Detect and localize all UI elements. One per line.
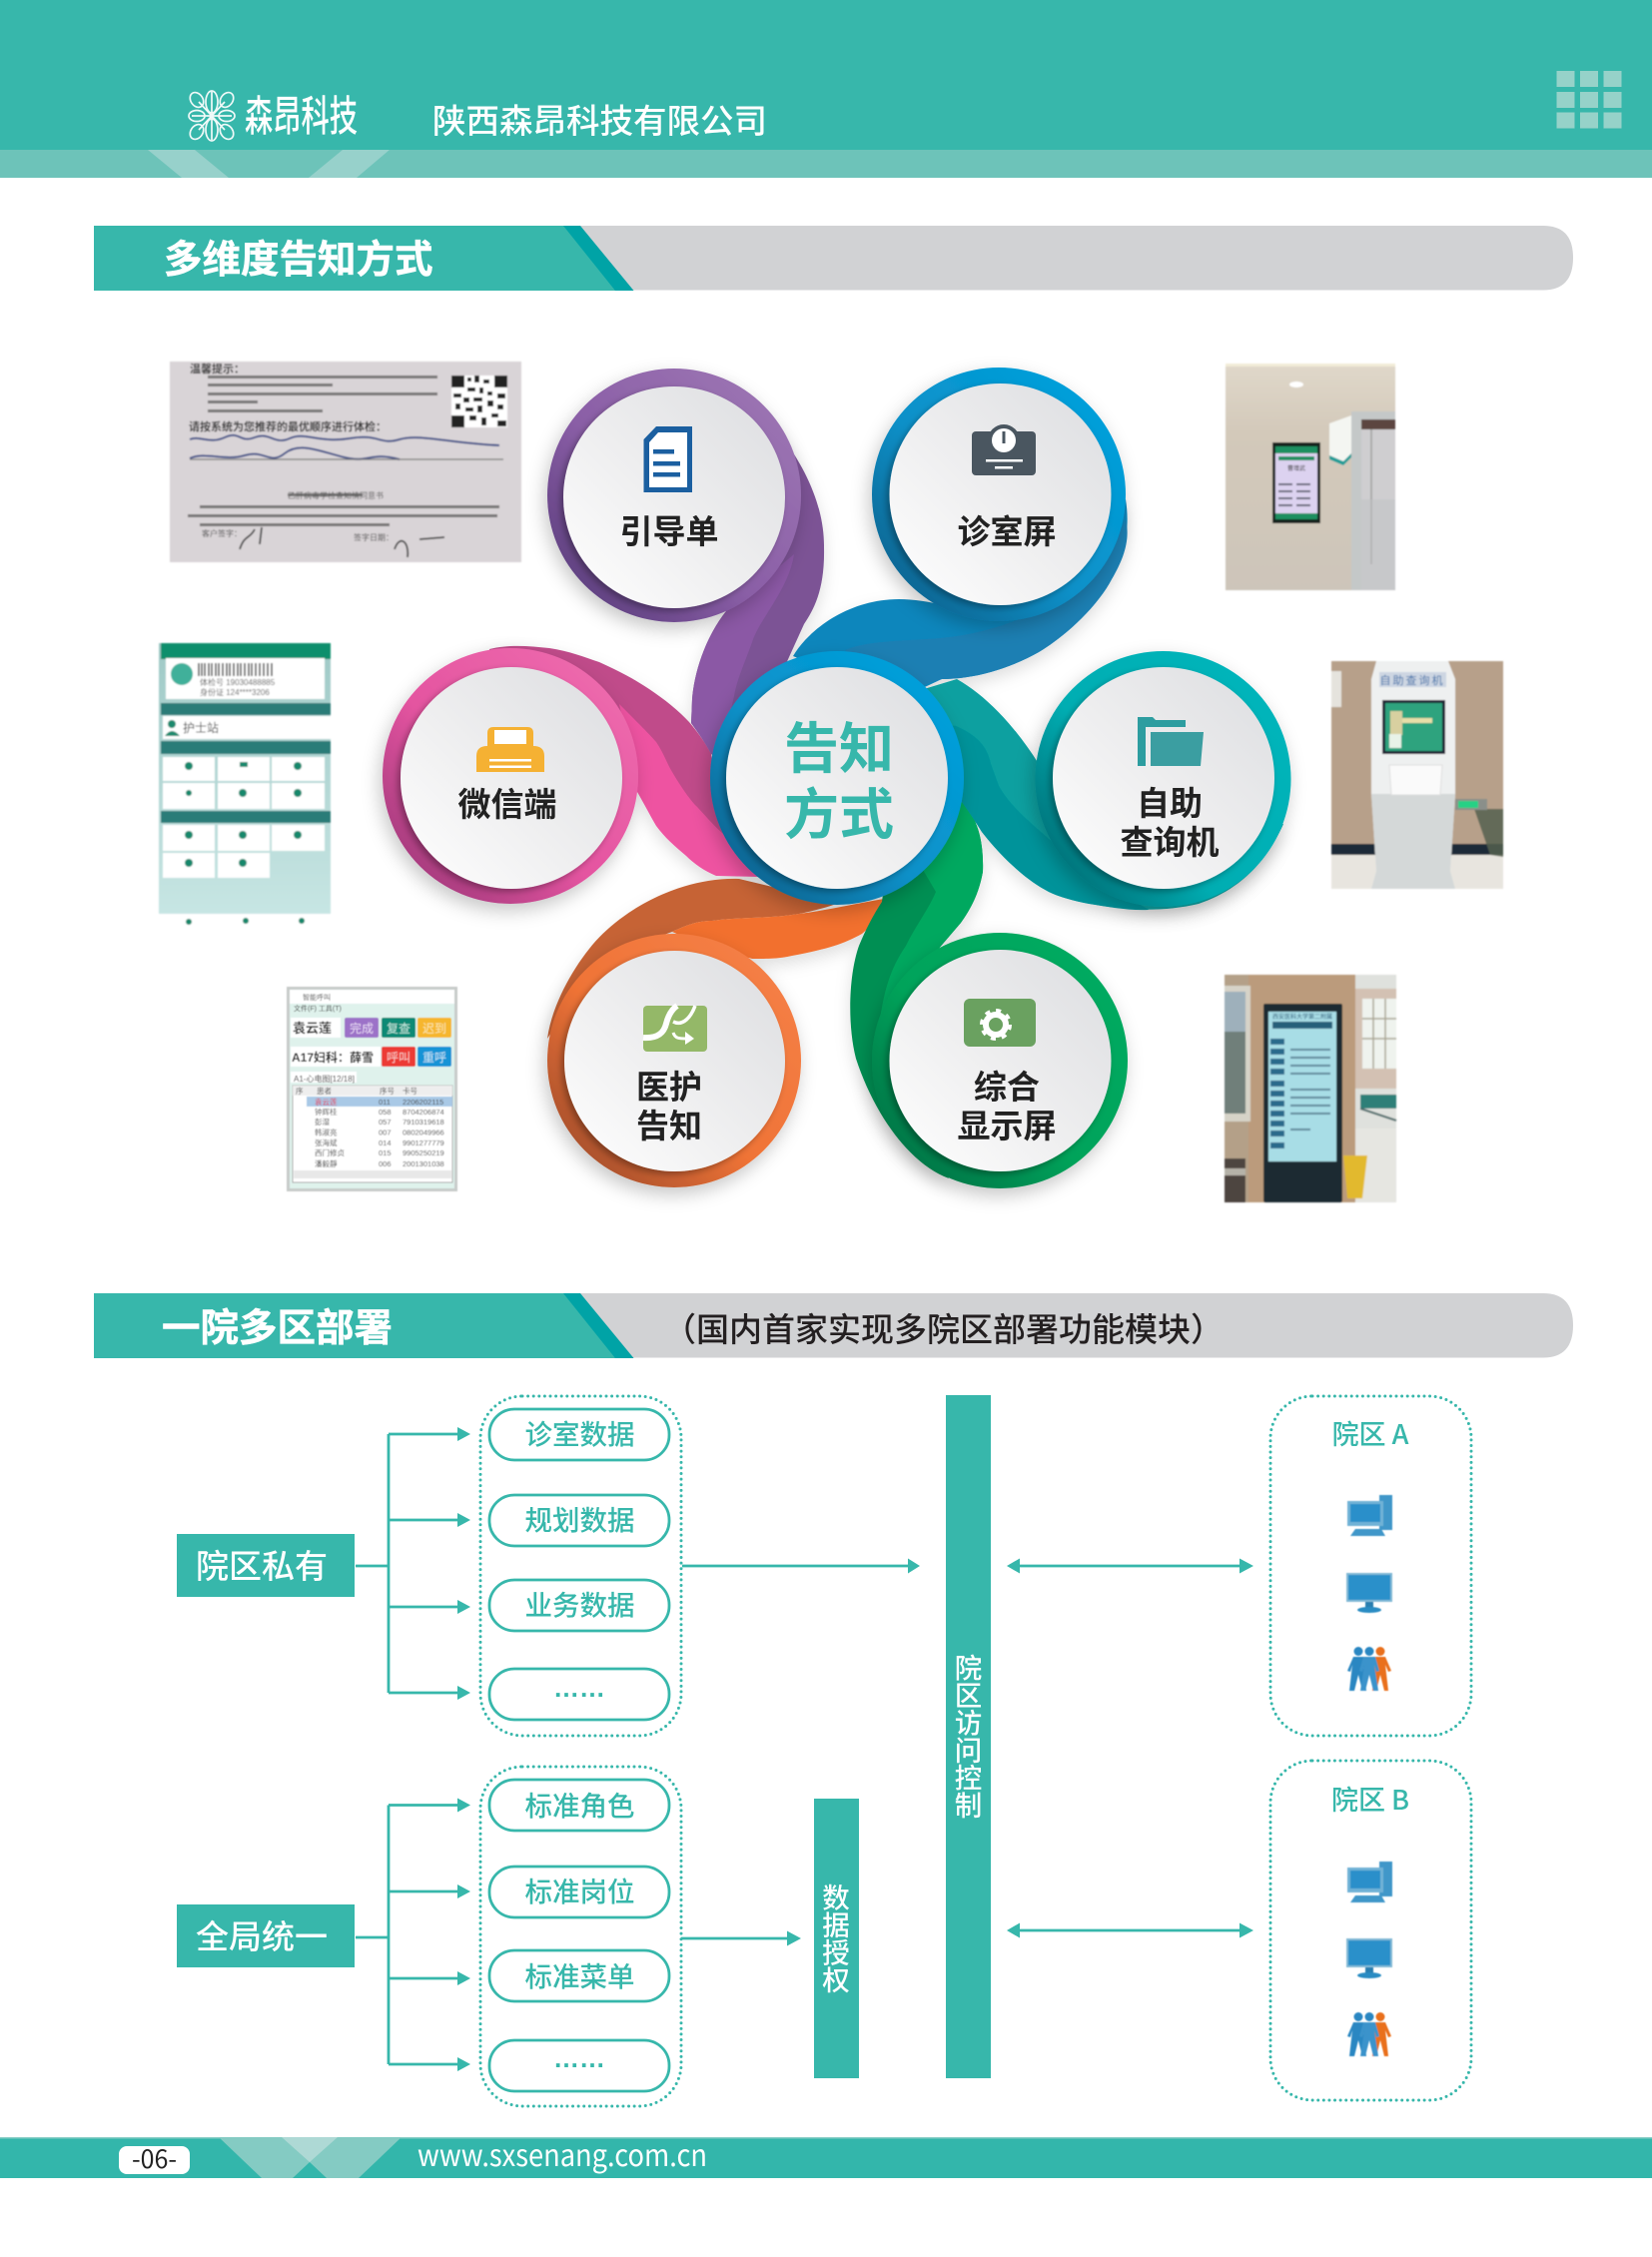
photo: 医护告知 software window: 9905250219 [403, 1148, 444, 1157]
group: global standard pills [480, 1767, 681, 2106]
bar: 院区访问控制: 访 [955, 1708, 982, 1739]
bar: 院区访问控制: 院 [955, 1653, 982, 1684]
section heading: 一院多区部署: 一院多区部署 [162, 1307, 393, 1350]
icon: printer [476, 727, 544, 772]
node: 微信端 [383, 648, 638, 904]
website url: www.sxsenang.com.cn [417, 2131, 707, 2175]
photo: 综合显示屏 kiosk: 西安医科大学第二附属 [1272, 1013, 1332, 1021]
arrow: global data to data authorization [681, 1931, 801, 1945]
photo: 医护告知 software window: 潘毅靜 [315, 1158, 338, 1168]
node: 引导单: 引导单 [619, 513, 719, 550]
photo: 诊室屏 on wall [1226, 364, 1395, 590]
bar: 数据授权: 据 [822, 1909, 850, 1941]
logo: 森昂科技: 森昂科技 [245, 93, 358, 140]
box: 院区私有: 院区私有 [196, 1548, 328, 1585]
node: 诊室屏: 诊室屏 [957, 513, 1057, 550]
group: private data pills: 业务数据 [525, 1590, 635, 1621]
header band [0, 0, 1652, 178]
bar: 数据授权: 授 [822, 1937, 850, 1968]
photo: 医护告知 software window: 文件(F) 工具(T) [294, 1004, 342, 1013]
box: 全局统一 [177, 1904, 355, 1967]
node: 综合显示屏 [872, 933, 1128, 1188]
node: 医护告知: 医护 [636, 1069, 702, 1106]
bar: 数据授权 [814, 1799, 859, 2078]
photo: 医护告知 software window: 智能呼叫 [303, 993, 331, 1002]
panel: 院区 B: 院区 B [1331, 1779, 1409, 1818]
photo: 医护告知 software window: 卡号 [403, 1086, 417, 1096]
group: private data pills: 规划数据 [525, 1505, 635, 1536]
photo: 自助查询机 kiosk [1331, 661, 1503, 889]
node: center 告知方式 [710, 651, 964, 905]
photo: 医护告知 software window: 重呼 [422, 1051, 446, 1065]
group: private data pills [480, 1396, 681, 1736]
photo: 医护告知 software window: 序号 [380, 1086, 395, 1096]
photo: 微信端 phone screen: 体检号 19030488885 [200, 677, 276, 687]
photo: 医护告知 software window: 057 [379, 1118, 392, 1127]
page number [119, 2140, 190, 2176]
arrow: access control to 院区 B [1007, 1923, 1253, 1937]
photo: 引导单 paper: 签字日期： [354, 532, 394, 542]
panel: 院区 A [1270, 1396, 1471, 1736]
icon: grid [1556, 71, 1622, 128]
photo: 医护告知 software window: A1-心电图[12/18] [294, 1074, 355, 1084]
node: center 告知方式: 方式 [784, 784, 894, 846]
photo: 医护告知 software window: 058 [379, 1108, 392, 1117]
box: 全局统一: 全局统一 [196, 1918, 328, 1955]
photo: 医护告知 software window: 0802049966 [403, 1128, 444, 1136]
bar: 数据授权: 数 [822, 1882, 850, 1913]
photo: 微信端 phone screen [159, 643, 331, 931]
photo: 医护告知 software window: 钟辉桂 [315, 1107, 338, 1117]
node: 医护告知 [547, 934, 801, 1187]
photo: 医护告知 software window: 完成 [350, 1021, 374, 1036]
icon: folder [1138, 717, 1204, 766]
panel: 院区 B [1270, 1761, 1471, 2100]
photo: 医护告知 software window: 彭湿 [315, 1117, 330, 1127]
section heading: 一院多区部署 [94, 1293, 1573, 1358]
section heading: 多维度告知方式: 多维度告知方式 [164, 239, 433, 282]
photo: 医护告知 software window: 序 [296, 1086, 304, 1096]
photo: 医护告知 software window: 袁云莲 [315, 1097, 338, 1107]
node: 综合显示屏: 显示屏 [957, 1108, 1057, 1144]
photo: 医护告知 software window: 015 [379, 1148, 392, 1157]
group: private data pills: …… [553, 1673, 605, 1703]
group: private data pills: 诊室数据 [525, 1419, 635, 1450]
footer band [0, 2137, 1652, 2178]
icon: people [1347, 1647, 1391, 1691]
logo: 森昂科技 [187, 90, 358, 142]
node: 自助查询机: 自助 [1137, 785, 1203, 822]
ribbons of the swirl diagram [489, 377, 1283, 1178]
photo: 医护告知 software window: A17妇科：薛雪 [292, 1050, 374, 1065]
photo: 医护告知 software window: 9901277779 [403, 1138, 444, 1147]
icon: people [1347, 2012, 1391, 2056]
photo: 医护告知 software window [287, 987, 457, 1191]
bar: 数据授权: 权 [822, 1965, 850, 1995]
photo: 医护告知 software window: 2206202115 [403, 1098, 443, 1107]
photo: 引导单 paper: 乙肝病毒学检查知情同意书 [288, 490, 384, 500]
node: center 告知方式: 告知 [784, 718, 894, 780]
photo: 引导单 paper: 温馨提示： [190, 362, 245, 376]
connector: 全局统一 branches [356, 1798, 470, 2071]
photo: 引导单 paper: 请按系统为您推荐的最优顺序进行体检： [189, 419, 387, 433]
photo: 医护告知 software window: 张海斌 [315, 1137, 338, 1147]
bar: 院区访问控制 [946, 1395, 991, 2078]
bar: 院区访问控制: 问 [955, 1736, 982, 1766]
group: global standard pills: 标准菜单 [525, 1961, 635, 1992]
photo: 微信端 phone screen: 身份证 124****3206 [200, 687, 270, 697]
section heading: 一院多区部署: （国内首家实现多院区部署功能模块） [663, 1311, 1224, 1348]
node: 综合显示屏: 综合 [974, 1069, 1040, 1106]
photo: 医护告知 software window: 迟到 [422, 1022, 446, 1036]
icon: screen with gauge [972, 424, 1036, 475]
arrow: access control to 院区 A [1007, 1558, 1253, 1574]
photo: 医护告知 software window: 8704206874 [403, 1108, 444, 1117]
photo: 医护告知 software window: 006 [379, 1159, 392, 1168]
group: global standard pills: 标准岗位 [525, 1877, 635, 1907]
node: 自助查询机: 查询机 [1121, 824, 1219, 861]
box: 院区私有 [177, 1534, 355, 1597]
photo: 医护告知 software window: 7910319618 [403, 1118, 444, 1127]
icon: monitor [1346, 1938, 1392, 1978]
photo: 医护告知 software window: 007 [379, 1128, 392, 1136]
connector: 院区私有 branches [356, 1427, 470, 1700]
group: global standard pills: 标准角色 [525, 1791, 635, 1822]
photo: 诊室屏 on wall: 曹增武 [1287, 464, 1305, 472]
bar: 院区访问控制: 控 [955, 1763, 982, 1794]
node: 引导单 [547, 369, 801, 622]
photo: 微信端 phone screen: 护士站 [183, 721, 219, 735]
arrow: private data to access control [682, 1558, 920, 1574]
node: 医护告知: 告知 [636, 1108, 702, 1144]
photo: 医护告知 software window: 西门修贞 [315, 1147, 345, 1157]
panel: 院区 A: 院区 A [1332, 1413, 1409, 1452]
icon: gear [964, 999, 1036, 1047]
photo: 引导单 paper: 客户签字： [202, 528, 242, 538]
icon: monitor [1346, 1573, 1392, 1613]
photo: 医护告知 software window: 呼叫 [387, 1051, 411, 1065]
icon: desktop computer [1347, 1862, 1392, 1902]
node: 微信端: 微信端 [457, 786, 557, 823]
photo: 综合显示屏 kiosk [1225, 975, 1396, 1202]
photo: 医护告知 software window: 复查 [387, 1022, 411, 1036]
icon: exchange arrows [643, 1006, 707, 1052]
photo: 医护告知 software window: 2001301038 [403, 1159, 444, 1168]
photo: 引导单 paper [170, 362, 521, 562]
photo: 医护告知 software window: 014 [379, 1138, 392, 1147]
node: 自助查询机 [1035, 651, 1290, 907]
bar: 院区访问控制: 区 [955, 1680, 982, 1712]
icon: desktop computer [1347, 1495, 1392, 1536]
icon: document [643, 426, 692, 492]
photo: 医护告知 software window: 011 [379, 1098, 391, 1107]
photo: 医护告知 software window: 患者 [317, 1086, 332, 1096]
bar: 院区访问控制: 制 [955, 1790, 982, 1822]
photo: 医护告知 software window: 韩淑亮 [315, 1127, 338, 1136]
group: global standard pills: …… [553, 2043, 605, 2073]
photo: 医护告知 software window: 袁云莲 [293, 1021, 332, 1036]
photo: 自助查询机 kiosk: 自助查询机 [1380, 673, 1444, 687]
company name: 陕西森昂科技有限公司 [432, 104, 767, 141]
page number: -06- [132, 2140, 177, 2176]
section heading: 多维度告知方式 [94, 226, 1573, 291]
node: 诊室屏 [872, 368, 1126, 621]
